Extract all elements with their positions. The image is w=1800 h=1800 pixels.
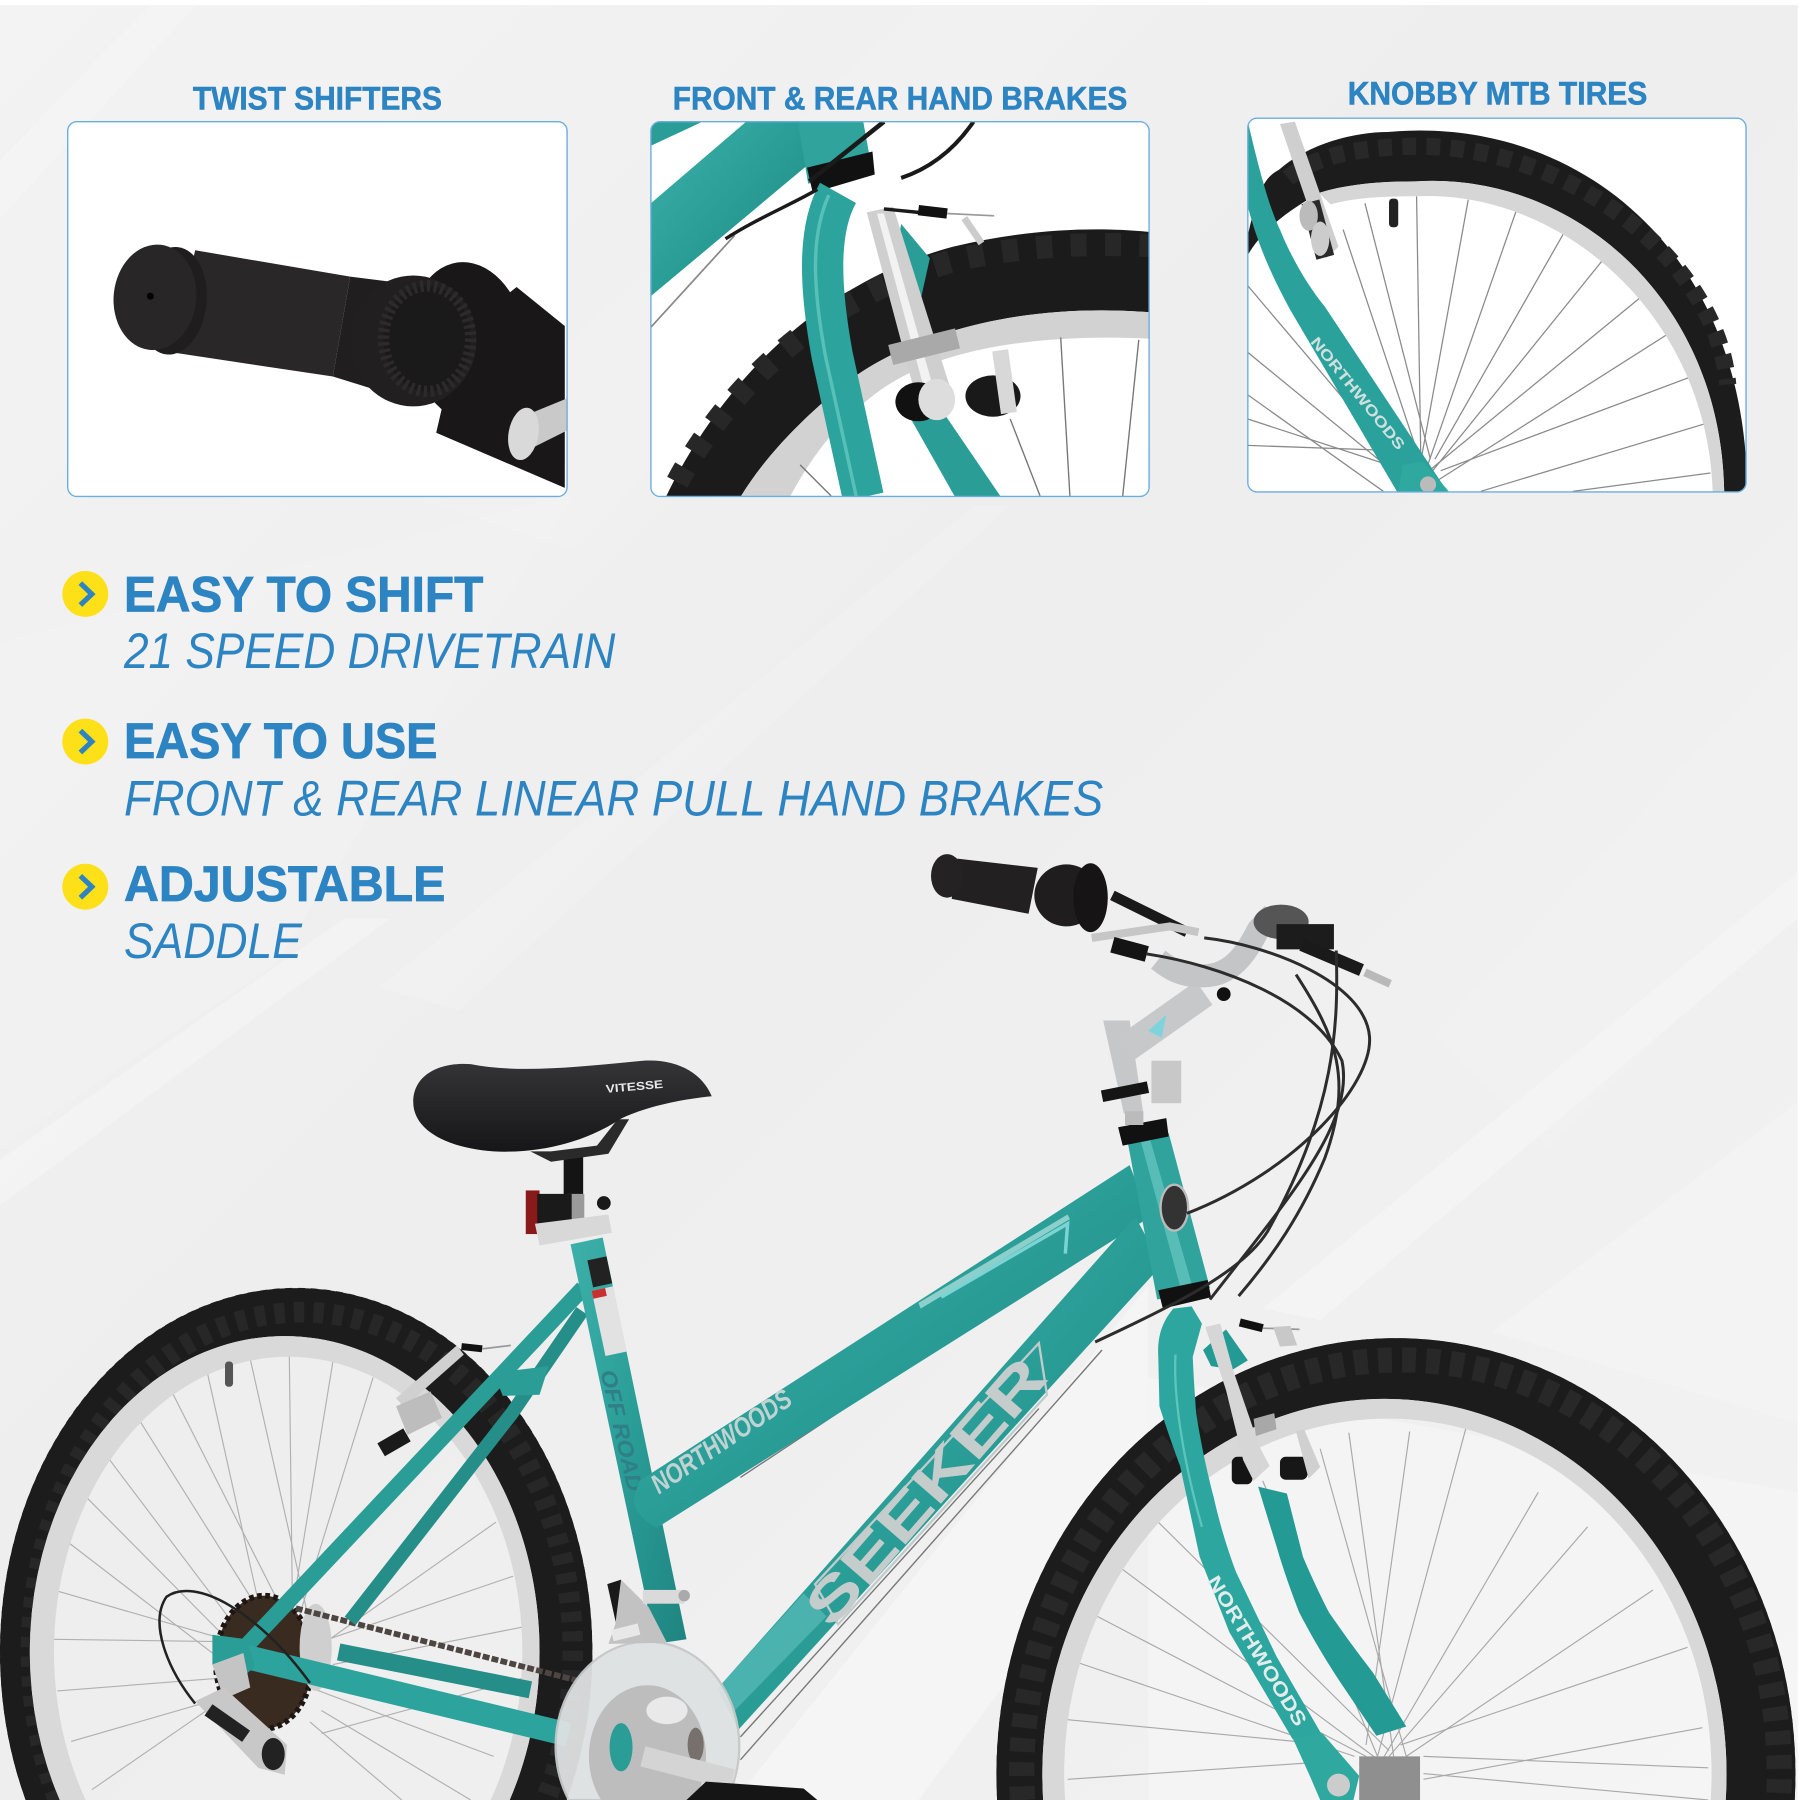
crank arm xyxy=(643,1756,732,1779)
down tube xyxy=(651,122,806,327)
front wheel xyxy=(996,1338,1795,1800)
icon: yellow chevron bullet xyxy=(62,719,108,765)
fork blade xyxy=(1248,122,1449,494)
front rim xyxy=(1042,1399,1727,1800)
thin cables under tubes xyxy=(740,1255,1102,1760)
brake arm xyxy=(1280,122,1339,260)
fork decal: NORTHWOODS xyxy=(1307,334,1408,453)
front derailleur xyxy=(607,1580,690,1644)
crankset xyxy=(556,1580,817,1800)
warning stickers xyxy=(587,1256,627,1356)
brake and shift cables xyxy=(1095,938,1370,1342)
bicycle xyxy=(0,854,1795,1800)
rim clamp xyxy=(1254,1413,1277,1436)
saddle xyxy=(413,1060,712,1162)
seeker decal: SEEKER xyxy=(793,1345,1059,1639)
fork xyxy=(1158,1306,1420,1800)
feature: easy to use xyxy=(62,712,1103,827)
stem clamp xyxy=(1101,1081,1149,1102)
down tube xyxy=(717,1217,1162,1730)
chainring xyxy=(589,1685,706,1800)
panel: twist shifter photo xyxy=(68,122,567,496)
inner seat stay xyxy=(350,1311,582,1621)
grip end cap xyxy=(114,244,207,354)
stem xyxy=(1126,993,1204,1048)
bar xyxy=(1158,914,1273,976)
fork decal: NORTHWOODS xyxy=(1202,1572,1311,1730)
rear wheel xyxy=(0,1288,592,1800)
stay bridge xyxy=(494,1366,549,1396)
rear frame stays xyxy=(212,1288,583,1735)
panel: tires photo xyxy=(1248,118,1747,494)
rear tire xyxy=(0,1288,592,1800)
hub xyxy=(1420,476,1449,492)
spokes xyxy=(1248,196,1710,491)
rear rim xyxy=(30,1336,540,1800)
seat clamp xyxy=(535,1215,612,1246)
valve stem xyxy=(1389,199,1398,227)
seat post and clamp xyxy=(526,1154,612,1246)
seat stay xyxy=(235,1288,583,1658)
head badge xyxy=(1161,1185,1188,1231)
left brake lever and shifter xyxy=(1092,895,1198,954)
right brake pad xyxy=(1280,1457,1308,1480)
rear fork blade xyxy=(900,224,930,296)
pedal xyxy=(686,1782,817,1800)
feature: easy to use: EASY TO USE xyxy=(124,712,437,769)
cassette and chain xyxy=(216,1596,577,1729)
valve stem xyxy=(225,1361,233,1387)
shifter barrel xyxy=(369,276,476,406)
rear fork blade xyxy=(1203,1329,1406,1736)
chain xyxy=(287,1606,577,1681)
feature: adjustable: SADDLE xyxy=(124,912,303,969)
brake arm xyxy=(867,207,1021,421)
shifter body xyxy=(436,287,565,488)
left grip xyxy=(931,854,1108,932)
chainring guard xyxy=(556,1642,739,1800)
feature: easy to shift: EASY TO SHIFT xyxy=(124,566,483,623)
feature: adjustable xyxy=(62,855,445,969)
grip body xyxy=(172,250,350,377)
fork blade xyxy=(823,193,863,497)
rear chain stay behind xyxy=(339,1652,530,1690)
left brake arm xyxy=(1205,1324,1270,1481)
icon: yellow chevron bullet xyxy=(62,864,108,910)
spokes xyxy=(800,338,1139,496)
top tube xyxy=(634,1165,1150,1528)
feature: easy to shift xyxy=(62,566,616,679)
grip collar xyxy=(333,276,388,388)
icon: yellow chevron bullet xyxy=(62,571,108,617)
cable xyxy=(1240,1322,1263,1328)
shifter flange xyxy=(430,262,510,410)
front tire xyxy=(996,1338,1795,1800)
cassette xyxy=(216,1596,312,1729)
right brake arm xyxy=(1296,1429,1320,1479)
front spokes xyxy=(1068,1428,1708,1800)
knobby tire xyxy=(1248,131,1747,494)
top tube decal: NORTHWOODS xyxy=(645,1382,798,1500)
panel: brakes photo xyxy=(651,122,1149,497)
steerer xyxy=(1103,1021,1143,1114)
stem and handlebar xyxy=(931,854,1390,1125)
heading: knobby mtb tires: KNOBBY MTB TIRES xyxy=(1348,75,1647,111)
head tube xyxy=(798,122,872,184)
seat tube xyxy=(571,1238,686,1644)
heading: twist shifters: TWIST SHIFTERS xyxy=(193,80,442,116)
feature: easy to shift: 21 SPEED DRIVETRAIN xyxy=(123,622,616,679)
front fork blade xyxy=(1158,1306,1322,1739)
chain stay xyxy=(235,1654,568,1735)
rear brake xyxy=(377,1345,511,1456)
silver lever xyxy=(508,398,566,460)
right shifter xyxy=(1254,905,1390,984)
feature: easy to use: FRONT & REAR LINEAR PULL HAND BRAKES xyxy=(124,770,1103,827)
headset ring xyxy=(807,152,875,193)
tire detail xyxy=(666,229,1149,497)
dropout xyxy=(212,1635,255,1688)
left brake pad xyxy=(1232,1457,1252,1484)
head tube and headset xyxy=(1118,1118,1211,1309)
feature: adjustable: ADJUSTABLE xyxy=(124,855,445,912)
front brake xyxy=(1205,1322,1320,1484)
dropout and hub xyxy=(1293,1733,1359,1800)
saddle: VITESSE xyxy=(605,1079,664,1096)
rear derailleur xyxy=(160,1591,310,1775)
stem reflector xyxy=(1151,1061,1181,1103)
rear spokes xyxy=(54,1355,525,1800)
cables xyxy=(726,122,994,243)
seat tube decal: OFF ROAD xyxy=(596,1367,648,1494)
heading: front and rear hand brakes: FRONT & REAR HAND BRAKES xyxy=(673,80,1127,116)
reflector xyxy=(526,1190,540,1234)
